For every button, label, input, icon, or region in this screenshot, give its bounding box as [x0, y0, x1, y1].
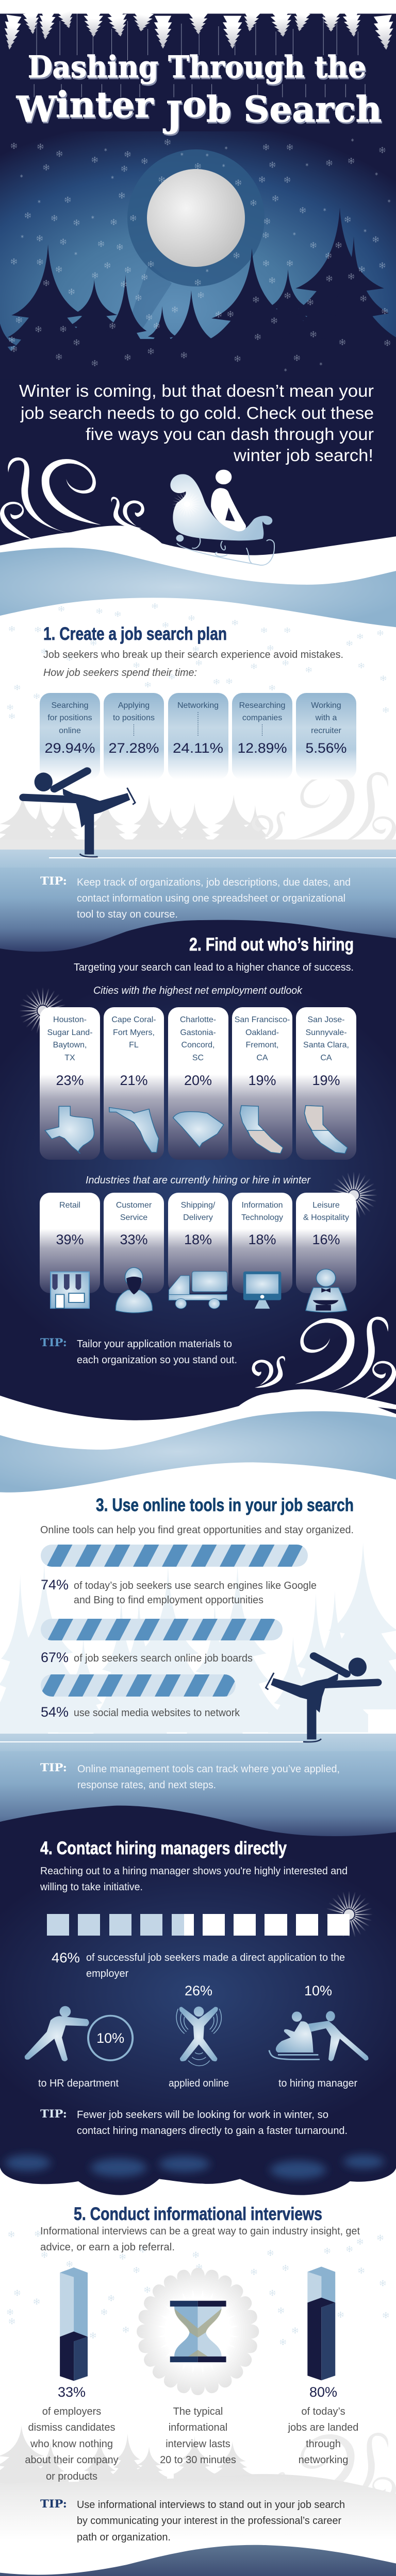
card: recruiter: recruiter	[311, 726, 342, 735]
icon: computer monitor	[243, 1272, 281, 1309]
snow drift with swirls	[0, 457, 144, 550]
card: retail	[40, 1193, 100, 1293]
card: Houston: Baytown,	[53, 1041, 87, 1049]
time spent cards	[40, 693, 356, 779]
card: San Francisco: Fremont,	[245, 1041, 279, 1049]
stat: 33 percent: about their company	[25, 2454, 119, 2466]
title: b	[206, 89, 231, 130]
card: searching online: for positions	[47, 714, 92, 722]
navy wave	[0, 2545, 396, 2576]
pale tree backdrop	[0, 1543, 396, 1734]
stat: interview length	[160, 2406, 236, 2466]
icon: California, south highlighted	[304, 1106, 348, 1154]
card: San Francisco: 19%	[248, 1073, 276, 1088]
tip 2: each organization so you stand out.	[77, 1354, 237, 1366]
stat: 80 percent: jobs are landed	[288, 2422, 358, 2433]
bar: 54 percent	[41, 1674, 236, 1697]
card: shipping: Shipping/	[181, 1201, 216, 1210]
tip 3: response rates, and next steps.	[77, 1780, 216, 1791]
card: leisure: Leisure	[312, 1201, 340, 1210]
card: recruiter: Working	[311, 701, 341, 710]
stat: 74 percent: and Bing to find employment opportunities	[74, 1595, 263, 1606]
card: searching online: Searching	[51, 701, 89, 710]
card: Houston: 23%	[56, 1073, 84, 1088]
card: searching online: online	[59, 726, 81, 735]
title: Dashing Through the	[28, 49, 366, 84]
icon: South Carolina	[173, 1112, 224, 1147]
tip 1: tool to stay on course.	[77, 909, 178, 920]
card: researching: Researching	[239, 701, 285, 710]
industry icons	[51, 1267, 347, 1313]
card: San Jose: Santa Clara,	[303, 1041, 349, 1049]
background snowflakes	[7, 603, 389, 719]
industries caption: Industries that are currently hiring or hire in winter	[86, 1175, 311, 1186]
square meter 46 percent	[47, 1914, 350, 1936]
blue snow band	[0, 1411, 396, 1493]
stat: interview length: interview lasts	[166, 2438, 230, 2450]
card: customer service	[104, 1193, 164, 1293]
stat: 26 percent: 26%	[185, 1983, 212, 1998]
card: Cape Coral: Cape Coral-	[111, 1015, 156, 1024]
bar: 67 percent	[41, 1619, 283, 1640]
stat: 33 percent: who know nothing	[30, 2438, 113, 2450]
title: inter	[56, 84, 154, 126]
stat: 46 percent: of successful job seekers made a direct application to the	[86, 1952, 345, 1963]
figure labels: to hiring manager	[278, 2078, 357, 2089]
stat: 67 percent	[41, 1650, 253, 1665]
title: J	[163, 94, 183, 135]
intro copy: willing to take initiative.	[40, 1882, 143, 1893]
title	[16, 49, 382, 135]
card: recruiter: with a	[315, 714, 337, 722]
magnifying glass behind the moon	[127, 149, 265, 330]
icon: store	[51, 1272, 89, 1308]
cloud highlights	[5, 2155, 384, 2179]
tip 5: path or organization.	[77, 2532, 171, 2543]
card: searching online	[40, 693, 100, 779]
card: customer service: Service	[120, 1213, 147, 1222]
card: information technology: Information	[241, 1201, 283, 1210]
stat: 74 percent: of today’s job seekers use search engines like Google	[74, 1580, 317, 1591]
card: information technology	[232, 1193, 292, 1293]
navy background	[0, 920, 396, 1437]
card: researching: 12.89%	[237, 740, 287, 756]
card: shipping: 18%	[184, 1232, 212, 1247]
stat: 54 percent	[41, 1704, 240, 1720]
stat: 54 percent: use social media websites to network	[74, 1707, 240, 1719]
blue snow band	[0, 548, 396, 627]
card: Houston: Sugar Land-	[47, 1028, 93, 1037]
bar: 80 percent	[307, 2266, 335, 2380]
firework on city card	[20, 988, 66, 1034]
glow behind the moon	[0, 131, 396, 379]
stat: 33 percent: dismiss candidates	[28, 2422, 115, 2433]
heading: 1. Create a job search plan	[43, 624, 227, 644]
stat in circle: 10%	[96, 2030, 124, 2046]
stat: 33 percent: or products	[46, 2471, 97, 2482]
icon: snow angel	[176, 2007, 221, 2066]
panel: section 4 hiring managers	[0, 1806, 396, 2195]
intro copy: Informational interviews can be a great way to gain industry insight, get	[40, 2226, 360, 2237]
card: retail: 39%	[56, 1232, 84, 1247]
ice strip	[0, 850, 396, 868]
figure labels	[38, 2078, 357, 2089]
stat: 80 percent: networking	[299, 2454, 348, 2466]
intro copy: Job seekers who break up their search experience avoid mistakes.	[43, 649, 343, 660]
card: applying	[104, 693, 164, 779]
city cards	[40, 1007, 356, 1160]
icon: skater	[23, 771, 135, 857]
card: researching: companies	[242, 714, 282, 722]
intro copy	[40, 2226, 360, 2253]
ice line	[49, 857, 396, 858]
card: applying: Applying	[118, 701, 150, 710]
tip 1	[40, 874, 351, 920]
stat: 67 percent: of job seekers search online job boards	[74, 1653, 253, 1664]
card: applying: 27.28%	[108, 740, 159, 756]
card: networking: Networking	[177, 701, 219, 710]
heading: 5. Conduct informational interviews	[74, 2204, 322, 2224]
card: Charlotte: 20%	[184, 1073, 212, 1088]
icon: person pushing sled	[269, 2011, 369, 2061]
background snowflakes	[7, 2231, 389, 2345]
bar: 74 percent	[41, 1545, 308, 1567]
intro text: five ways you can dash through your	[86, 425, 374, 444]
icon: person pushing snowball	[25, 2006, 133, 2061]
tip 5	[40, 2497, 345, 2543]
tip 4: contact hiring managers directly to gain a faster turnaround.	[77, 2125, 348, 2137]
industry cards	[40, 1193, 356, 1293]
heading: 4. Contact hiring managers directly	[40, 1838, 287, 1858]
stat: 74 percent: 74%	[41, 1577, 69, 1592]
card: shipping	[168, 1193, 228, 1293]
tip 5: TIP:	[40, 2497, 67, 2510]
card: information technology: 18%	[248, 1232, 276, 1247]
bar: 33 percent	[60, 2267, 88, 2381]
stat: 10 percent hiring manager: 10%	[304, 1983, 332, 1998]
card: searching online: 29.94%	[44, 740, 95, 756]
heading: 2. Find out who’s hiring	[189, 935, 354, 955]
panel: section 2 who is hiring	[0, 920, 396, 1741]
panel: section 5 informational interviews	[0, 2204, 396, 2557]
stat: 80 percent: 80%	[309, 2384, 337, 2400]
card: information technology: Technology	[241, 1213, 283, 1222]
stat: 80 percent: of today’s	[301, 2406, 345, 2417]
card: Houston: TX	[64, 1054, 75, 1062]
navy glow	[0, 969, 396, 1381]
stat: 46 percent	[52, 1950, 345, 1979]
garland of snowy branches	[0, 0, 396, 97]
intro copy: Reaching out to a hiring manager shows you're highly interested and	[40, 1866, 348, 1877]
card: San Jose: 19%	[312, 1073, 340, 1088]
navy background with cloud edge	[0, 1855, 396, 2195]
navy glow	[0, 1844, 396, 2143]
tip background gradient	[0, 1751, 396, 1844]
stat: 33 percent: 33%	[58, 2384, 86, 2400]
card: customer service: 33%	[120, 1232, 148, 1247]
icon: skater	[266, 1656, 378, 1742]
card: applying: to positions	[113, 714, 155, 722]
intro copy	[40, 1866, 348, 1893]
tip 1: TIP:	[40, 874, 67, 887]
tip 1: Keep track of organizations, job descriptions, due dates, and	[77, 877, 351, 888]
card: Charlotte	[168, 1007, 228, 1160]
intro text: winter job search!	[233, 446, 373, 465]
hero night sky	[0, 0, 396, 555]
card: Cape Coral: Fort Myers,	[113, 1028, 155, 1037]
card: networking	[168, 693, 228, 779]
stat: interview length: The typical	[173, 2406, 223, 2417]
stat: 80 percent	[288, 2384, 358, 2466]
tip 1: contact information using one spreadsheet or organizational	[77, 893, 345, 904]
branch tips	[0, 0, 396, 51]
card: researching	[232, 693, 292, 779]
figures	[25, 2006, 369, 2066]
tip 4	[40, 2107, 348, 2137]
card: San Francisco	[232, 1007, 292, 1160]
stat: interview length: 20 to 30 minutes	[160, 2454, 236, 2466]
firework on meter	[326, 1891, 372, 1938]
cities caption: Cities with the highest net employment outlook	[93, 985, 303, 996]
tip 3	[40, 1761, 340, 1791]
icon: California, north highlighted	[240, 1106, 283, 1154]
stat: 80 percent: through	[306, 2438, 341, 2450]
card: Charlotte: Concord,	[182, 1041, 214, 1049]
panel: footer	[0, 2545, 396, 2576]
card: Charlotte: Charlotte-	[180, 1015, 216, 1024]
figure labels: applied online	[169, 2078, 229, 2089]
card: Cape Coral: FL	[129, 1041, 139, 1049]
card: leisure: 16%	[312, 1232, 340, 1247]
card: San Francisco: San Francisco-	[235, 1015, 290, 1024]
intro copy: Online tools can help you find great opportunities and stay organized.	[40, 1524, 354, 1536]
tip 2: TIP:	[40, 1336, 67, 1349]
panel: section 1 job search plan	[0, 603, 396, 955]
icon: Texas	[45, 1106, 94, 1154]
snow drift with swirls	[0, 1317, 396, 1501]
stat: 54 percent: 54%	[41, 1704, 69, 1720]
tip background gradient	[0, 868, 396, 955]
grey snow hill	[0, 2474, 396, 2557]
card: San Francisco: CA	[256, 1054, 268, 1062]
ice strip	[0, 1734, 396, 1751]
card: San Jose: CA	[320, 1054, 332, 1062]
stat: 74 percent	[41, 1577, 317, 1606]
title: Search	[243, 89, 379, 130]
card: Houston: Houston-	[53, 1015, 87, 1024]
card: Houston	[40, 1007, 100, 1160]
card: retail: Retail	[59, 1201, 80, 1210]
card: Cape Coral	[104, 1007, 164, 1160]
panel: section 3 online tools	[0, 1495, 396, 1844]
intro text: job search needs to go cold. Check out these	[20, 403, 374, 422]
card: recruiter	[296, 693, 356, 779]
icon: sleigh with rider	[170, 470, 274, 565]
card: San Jose	[296, 1007, 356, 1160]
navy background top	[0, 1806, 396, 1871]
tip 2: Tailor your application materials to	[77, 1338, 232, 1350]
card: Charlotte: SC	[192, 1054, 204, 1062]
icon: hourglass in snowflake ring	[137, 2268, 259, 2395]
tip 2	[40, 1336, 237, 1366]
tip 4: Fewer job seekers will be looking for work in winter, so	[77, 2109, 328, 2121]
card: networking: 24.11%	[173, 740, 223, 756]
grey trees and swirls behind skater	[0, 772, 396, 865]
grey tree and swirl backdrop	[0, 2426, 396, 2526]
card: Cape Coral: 21%	[120, 1073, 148, 1088]
card: customer service: Customer	[116, 1201, 152, 1210]
card: San Jose: Sunnyvale-	[305, 1028, 347, 1037]
icon: delivery truck	[169, 1272, 227, 1309]
intro copy: Targeting your search can lead to a higher chance of success.	[74, 962, 354, 973]
tip 3: TIP:	[40, 1761, 67, 1774]
tip 3: Online management tools can track where you’ve applied,	[77, 1764, 340, 1775]
card: recruiter: 5.56%	[305, 740, 346, 756]
icon: Florida	[109, 1108, 159, 1153]
tip 5: by communicating your interest in the professional’s career	[77, 2515, 341, 2527]
white cover below band	[0, 1494, 396, 1741]
firework on industry card	[331, 1172, 377, 1218]
card: San Jose: San Jose-	[307, 1015, 345, 1024]
state maps	[45, 1106, 348, 1154]
card: leisure: & Hospitality	[303, 1213, 349, 1222]
title: W	[16, 89, 55, 130]
trees and falling snow	[0, 139, 396, 392]
stat: 33 percent	[25, 2384, 119, 2482]
title: o	[183, 84, 206, 125]
icon: waiter	[306, 1269, 347, 1312]
tip 5: Use informational interviews to stand out in your job search	[77, 2499, 345, 2511]
hanging strings	[34, 13, 365, 97]
icon: customer service agent	[116, 1267, 153, 1313]
figure labels: to HR department	[38, 2078, 119, 2089]
moon	[147, 169, 245, 267]
stat: 33 percent: of employers	[42, 2406, 101, 2417]
ice line	[0, 1741, 305, 1742]
panel: hero	[0, 0, 396, 627]
intro text	[19, 381, 374, 465]
intro copy: advice, or earn a job referral.	[40, 2242, 175, 2253]
stat: 46 percent: employer	[86, 1968, 129, 1979]
tip 4: TIP:	[40, 2107, 67, 2120]
intro text: Winter is coming, but that doesn’t mean your	[19, 381, 374, 400]
card: shipping: Delivery	[183, 1213, 213, 1222]
chart caption: How job seekers spend their time:	[43, 667, 197, 679]
stat: 46 percent: 46%	[52, 1950, 80, 1965]
card: San Francisco: Oakland-	[245, 1028, 279, 1037]
stat: interview length: informational	[169, 2422, 227, 2433]
card: leisure	[296, 1193, 356, 1293]
card: Charlotte: Gastonia-	[180, 1028, 216, 1037]
stat: 67 percent: 67%	[41, 1650, 69, 1665]
